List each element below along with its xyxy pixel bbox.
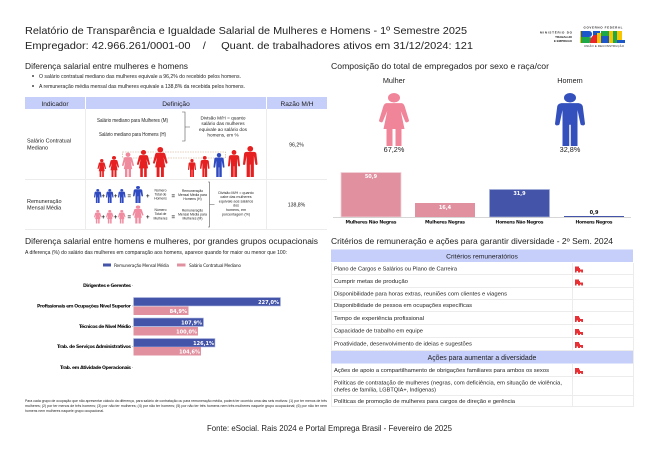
row: remuneração mensal média: Divisão M/H = quanto [218, 191, 254, 195]
bar chart: grupos ocupacionais: Trab. de Serviços Administrativos [57, 344, 131, 350]
row: remuneração mensal média: = [172, 215, 176, 221]
row: remuneração mensal média: porcentagem (%) [222, 212, 250, 216]
row: remuneração mensal média: Mensal Média para [178, 193, 207, 197]
rows: critérios: Disponibilidade para horas extras, reuniões com clientes e viagens [334, 292, 507, 298]
table header: Razão M/H [281, 101, 314, 108]
row: remuneração mensal média: Mulheres [154, 216, 168, 220]
rows: ações: Políticas de promoção de mulheres para cargos de direção e gerência [334, 399, 515, 405]
header: ações [331, 351, 633, 364]
row: remuneração mensal média: Mulheres (M) [183, 216, 202, 220]
icon: mulher: Mulher [383, 76, 406, 85]
table header: Definição [162, 101, 190, 108]
bar chart: sexo e raça: Homens Não Negros [496, 220, 544, 226]
rows: ações [334, 368, 562, 405]
icon: homem: Homem [557, 76, 583, 85]
row: remuneração mensal média: + [102, 215, 106, 221]
rows: ações: Ações de apoio a compartilhamento de obrigações familiares para ambos os sexos [334, 368, 549, 374]
text block: nota de rodapé: Para cada grupo de ocupação que não apresentar cálculo da diferença, para salário de contratação ou para remuneração média, poderá ter ocorrido uma das seis motivos: (1) por ter menos de três [25, 398, 327, 403]
row: remuneração mensal média: Homens [154, 196, 167, 200]
bar chart: sexo e raça [333, 172, 631, 226]
row: salário contratual mediano: salário das mulheres [201, 121, 245, 126]
row: remuneração mensal média: + [114, 215, 118, 221]
row: remuneração mensal média: Mensal Média para [178, 212, 207, 216]
row: salário contratual mediano [27, 112, 304, 177]
row: remuneração mensal média: Total de [155, 212, 167, 216]
title: Empregador: 42.966.261/0001-00 / Quant. de trabalhadores ativos em 31/12/2024: 121 [25, 41, 473, 52]
row: remuneração mensal média: dos [233, 204, 239, 208]
bar chart: grupos ocupacionais: 227,0% [258, 300, 279, 306]
logo: ministério e governo federal: UNIÃO E RECONSTRUÇÃO [584, 43, 625, 48]
row: salário contratual mediano: Salário Contratual [27, 138, 71, 144]
row: remuneração mensal média: cabe das mulheres [220, 195, 252, 199]
table header [25, 97, 327, 109]
row: remuneração mensal média: = [128, 194, 132, 200]
row: remuneração mensal média: Remuneração [27, 199, 62, 205]
bar chart: grupos ocupacionais: Trab. em Atividade Operacionais [60, 365, 131, 371]
row: remuneração mensal média: + [146, 194, 150, 200]
heading: diferença por grupos ocupacionais: Diferença salarial entre homens e mulheres, por grandes grupos ocupacionais [25, 236, 319, 246]
header: critérios remuneratórios [331, 250, 633, 262]
row: remuneração mensal média: Mensal Média [27, 206, 62, 212]
row: salário contratual mediano: Mediano [27, 146, 48, 152]
text block: nota de rodapé [25, 398, 327, 413]
legend: Remuneração Mensal Média [114, 262, 169, 269]
logo: ministério e governo federal: E EMPREGO [554, 39, 573, 43]
text block: nota de rodapé: mulheres; (2) por ter menos de três homens; (3) por não ter mulheres; (4) por não ter homens; (5) por não ter três homens nem três mulheres naquele grupo ocupacional; (6) por não ter nem [25, 403, 327, 408]
logo: ministério e governo federal: TRABALHO [555, 35, 573, 39]
row: remuneração mensal média: Número [154, 188, 167, 192]
bar chart: sexo e raça: 0,9 [590, 210, 599, 216]
rows: critérios: Plano de Cargos e Salários ou Plano de Carreira [334, 266, 457, 272]
row: remuneração mensal média: Homens (H) [183, 197, 202, 201]
row: remuneração mensal média: + [146, 215, 150, 221]
heading: critérios: Critérios de remuneração e ações para garantir diversidade - 2º Sem. 2024 [331, 236, 613, 246]
title: Relatório de Transparência e Igualdade Salarial de Mulheres e Homens - 1º Semestre 2025 [25, 26, 467, 37]
table header: Indicador [41, 101, 69, 108]
row: remuneração mensal média: = [128, 215, 132, 221]
rows: critérios [334, 266, 507, 348]
bar chart: grupos ocupacionais: Dirigentes e Gerentes [83, 283, 131, 289]
row: remuneração mensal média: Remuneração [182, 208, 203, 212]
icons: marcação de critérios [575, 266, 583, 374]
bar chart: grupos ocupacionais [37, 283, 280, 371]
row: remuneração mensal média: + [114, 194, 118, 200]
row: remuneração mensal média: Total de [155, 192, 167, 196]
legend: Salário Contratual Mediano [189, 262, 241, 269]
rows: critérios: Cumprir metas de produção [334, 279, 408, 285]
panel: tabela de critérios [331, 250, 634, 407]
bar chart: grupos ocupacionais: 84,9% [170, 309, 187, 315]
bar chart: grupos ocupacionais: 107,9% [181, 320, 202, 326]
row: remuneração mensal média [27, 182, 306, 227]
bar chart: grupos ocupacionais: Profissionais em Ocupações Nível Superior [37, 302, 132, 310]
icon: homem [555, 76, 585, 154]
bar chart: grupos ocupacionais: 126,1% [193, 341, 214, 347]
bar chart: sexo e raça: Homens Negros [576, 220, 613, 226]
row: remuneração mensal média: 138,8% [288, 202, 306, 208]
logo: ministério e governo federal: MINISTÉRIO DO [540, 30, 573, 34]
panel: tabela de indicadores [25, 97, 327, 230]
text block: explicação: A diferença (%) do salário das mulheres em comparação aos homens, aparece quando for maior ou menor que 100: [25, 250, 287, 256]
icon: mulher: 67,2% [384, 145, 405, 154]
row: remuneração mensal média: homens, em [226, 208, 246, 212]
rows: ações: chefes de família, LGBTQIA+, Indígenas) [334, 388, 436, 394]
header: ações: Ações para aumentar a diversidade [428, 355, 537, 362]
icon: homem: 32,8% [560, 145, 581, 154]
heading: diferença salarial: Diferença salarial entre mulheres e homens [25, 61, 188, 71]
row: remuneração mensal média: = [172, 194, 176, 200]
text block: bullets: O salário contratual mediano das mulheres equivale a 96,2% do recebido pelos homens. [39, 74, 241, 80]
footer: fonte: Fonte: eSocial. Rais 2024 e Portal Emprega Brasil - Fevereiro de 2025 [207, 423, 452, 433]
text block: nota de rodapé: homens nem mulheres naquele grupo ocupacional. [25, 408, 104, 413]
heading: composição: Composição do total de empregados por sexo e raça/cor [331, 61, 549, 71]
rows: critérios: Capacidade de trabalho em equipe [334, 328, 423, 334]
text block: bullets: A remuneração média mensal das mulheres equivale a 138,8% da recebida pelos homens. [39, 84, 245, 90]
title [25, 26, 473, 52]
rows: critérios: Disponibilidade de pessoa em ocupações específicas [334, 303, 472, 309]
rows: critérios: Tempo de experiência profissional [334, 316, 424, 322]
row: salário contratual mediano: Salário mediano para Mulheres (M) [97, 118, 168, 124]
bar chart: grupos ocupacionais: 104,6% [179, 349, 200, 355]
rows: ações: Políticas de contratação de mulheres (negras, com deficiência, em situação de violência, [334, 380, 562, 386]
bar chart: sexo e raça: 50,9 [365, 174, 378, 180]
bar chart: grupos ocupacionais: Técnicos de Nível Médio [79, 323, 131, 330]
text block: bullets [32, 74, 245, 90]
row: salário contratual mediano: Salário mediano para Homens (H) [99, 132, 166, 138]
row: salário contratual mediano: 96,2% [289, 142, 304, 148]
bar chart: sexo e raça: Mulheres Não Negras [346, 220, 397, 226]
logo: ministério e governo federal: GOVERNO FEDERAL [584, 26, 623, 30]
bar chart: sexo e raça: Mulheres Negras [425, 220, 465, 226]
logo: ministério e governo federal [540, 26, 625, 48]
rows: critérios: Proatividade, desenvolvimento de ideias e sugestões [334, 342, 472, 348]
row: salário contratual mediano: equivale ao salário dos [199, 127, 248, 132]
bar chart: grupos ocupacionais: 100,0% [176, 329, 197, 335]
row: remuneração mensal média: Remuneração [182, 189, 203, 193]
legend [103, 262, 241, 269]
bar chart: sexo e raça: 16,4 [439, 205, 452, 211]
header: critérios remuneratórios: Critérios remuneratórios [446, 254, 519, 260]
bar chart: sexo e raça: 31,9 [513, 191, 526, 197]
row: salário contratual mediano: Divisão M/H = quanto [201, 116, 246, 120]
row: salário contratual mediano: homens, em % [207, 132, 239, 138]
row: remuneração mensal média: Número [154, 208, 167, 212]
row: remuneração mensal média: + [102, 194, 106, 200]
row: remuneração mensal média: equivale aos salários [219, 200, 253, 204]
icon: mulher [379, 76, 409, 154]
